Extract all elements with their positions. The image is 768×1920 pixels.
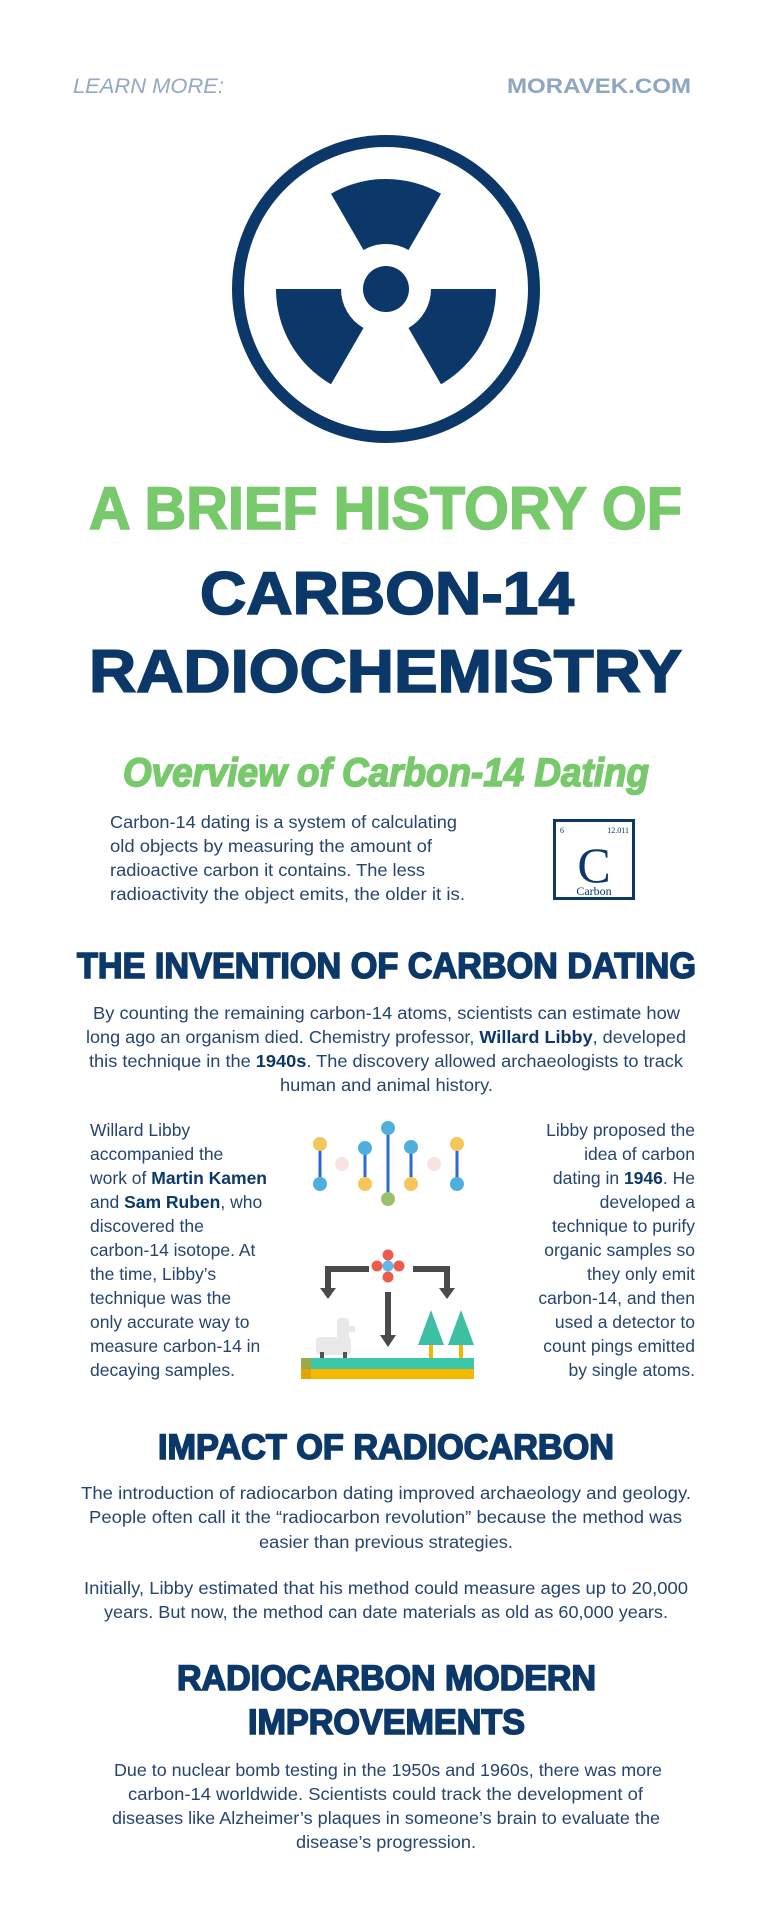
text block: impact (81, 1483, 691, 1622)
text block: right column (538, 1120, 695, 1380)
text block: impact: easier than previous strategies. (259, 1532, 513, 1552)
text block: modern improvements: disease’s progression. (296, 1832, 476, 1852)
header: website: MORAVEK.COM (507, 75, 691, 98)
text block: impact: Initially, Libby estimated that his method could measure ages up to 20,000 (84, 1578, 688, 1598)
icon: carbon element tile: 6 (560, 826, 564, 835)
text block: right column: carbon-14, and then (538, 1288, 695, 1308)
heading: modern improvements (177, 1659, 596, 1742)
text block: right column: they only emit (587, 1264, 695, 1284)
text block: right column: technique to purify (552, 1216, 695, 1236)
title: RADIOCHEMISTRY (89, 638, 682, 705)
text block: overview: radioactive carbon it contains. The less (110, 860, 425, 880)
text block: modern improvements: carbon-14 worldwide. Scientists could track the development of (128, 1784, 643, 1804)
icon: carbon element tile: 12.011 (607, 826, 629, 835)
heading: modern improvements: IMPROVEMENTS (248, 1703, 525, 1742)
text block: left column: work of Martin Kamen (89, 1168, 267, 1188)
icon: radiation symbol (238, 141, 534, 437)
text block: invention intro: human and animal history. (280, 1075, 493, 1095)
icon: carbon cycle illustration (301, 1250, 474, 1379)
text block: right column: developed a (600, 1192, 695, 1212)
text block: modern improvements: diseases like Alzheimer’s plaques in someone’s brain to evaluate the (112, 1808, 660, 1828)
text block: overview: old objects by measuring the amount of (110, 836, 432, 856)
text block: left column (89, 1120, 267, 1380)
text block: right column: idea of carbon (584, 1144, 695, 1164)
text block: left column: and Sam Ruben, who (90, 1192, 262, 1212)
heading: modern improvements: RADIOCARBON MODERN (177, 1659, 596, 1698)
title: CARBON-14 (200, 560, 575, 627)
heading: impact: IMPACT OF RADIOCARBON (158, 1428, 614, 1467)
text block: left column: measure carbon-14 in (90, 1336, 260, 1356)
text block: right column: count pings emitted (543, 1336, 695, 1356)
header: learn more: LEARN MORE: (73, 75, 224, 98)
text block: right column: used a detector to (555, 1312, 695, 1332)
text block: left column: accompanied the (90, 1144, 223, 1164)
text block: left column: the time, Libby’s (90, 1264, 216, 1284)
text block: overview: radioactivity the object emits, the older it is. (110, 884, 465, 904)
heading: overview: Overview of Carbon-14 Dating (123, 751, 649, 795)
icon: carbon element tile (554, 820, 634, 898)
text block: left column: decaying samples. (90, 1360, 235, 1380)
text block: invention intro (86, 1003, 686, 1095)
text block: modern improvements (112, 1760, 662, 1852)
text block: invention intro: long ago an organism died. Chemistry professor, Willard Libby, developed (86, 1027, 686, 1047)
icon: dna molecule (313, 1121, 464, 1206)
text block: left column: Willard Libby (90, 1120, 190, 1140)
text block: modern improvements: Due to nuclear bomb testing in the 1950s and 1960s, there was more (114, 1760, 662, 1780)
heading: invention: THE INVENTION OF CARBON DATING (77, 945, 696, 986)
text block: right column: by single atoms. (569, 1360, 695, 1380)
text block: right column: dating in 1946. He (553, 1168, 695, 1188)
text block: invention intro: this technique in the 1940s. The discovery allowed archaeologists to track (89, 1051, 683, 1071)
icon: carbon element tile: C (577, 837, 611, 893)
icon: carbon element tile: Carbon (576, 884, 612, 898)
text block: left column: discovered the (90, 1216, 204, 1236)
text block: impact: People often call it the “radiocarbon revolution” because the method was (89, 1507, 682, 1527)
text block: impact: years. But now, the method can date materials as old as 60,000 years. (104, 1602, 668, 1622)
text block: overview: Carbon-14 dating is a system of calculating (110, 812, 457, 832)
title: A BRIEF HISTORY OF (89, 475, 682, 542)
text block: left column: technique was the (90, 1288, 231, 1308)
text block: right column: Libby proposed the (546, 1120, 695, 1140)
text block: left column: only accurate way to (90, 1312, 250, 1332)
text block: impact: The introduction of radiocarbon dating improved archaeology and geology. (81, 1483, 691, 1503)
text block: overview (110, 812, 465, 904)
text block: invention intro: By counting the remaining carbon-14 atoms, scientists can estimate how (93, 1003, 680, 1023)
text block: left column: carbon-14 isotope. At (90, 1240, 256, 1260)
title (89, 475, 682, 705)
text block: right column: organic samples so (544, 1240, 695, 1260)
